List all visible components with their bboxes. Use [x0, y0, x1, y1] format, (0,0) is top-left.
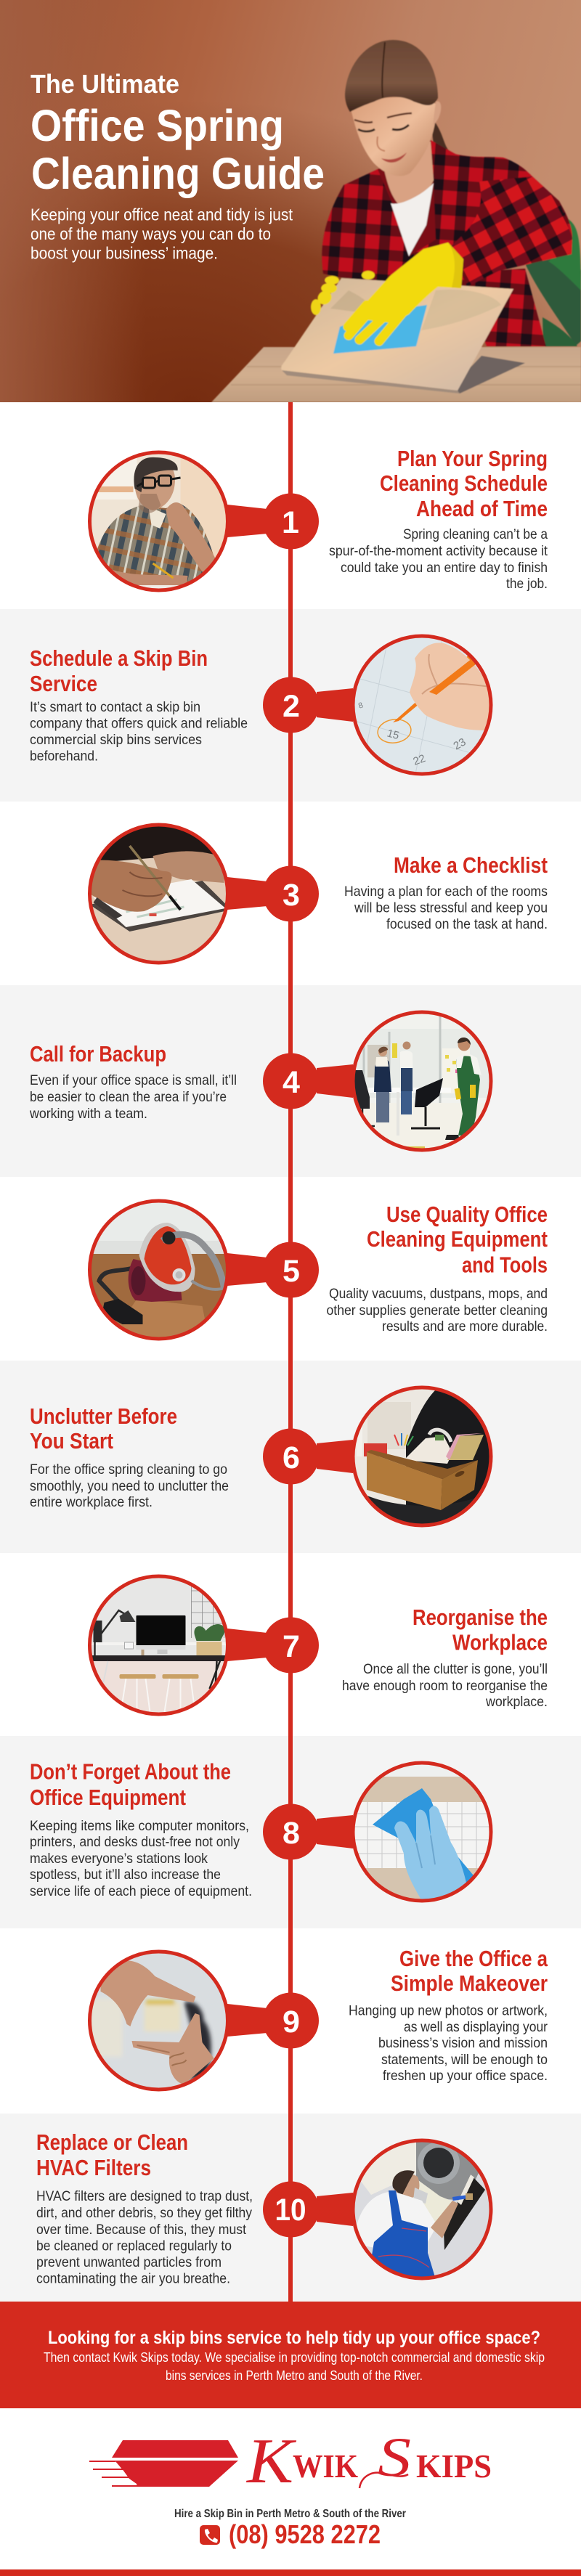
hero photo: woman wiping a laptop	[211, 40, 581, 402]
body text 8: Keeping items like computer monitors,	[30, 1818, 249, 1834]
panel: step 10 hvac filters	[0, 2114, 581, 2302]
body text 4: be easier to clean the area if you’re	[30, 1089, 227, 1105]
heading: use quality cleaning equipment: Cleaning Equipment	[367, 1226, 548, 1252]
connector to number 3	[227, 877, 267, 910]
body text 10: be cleaned or replaced regularly to	[36, 2238, 232, 2254]
heading: use quality cleaning equipment: Use Quality Office	[386, 1202, 548, 1227]
heading: unclutter before you start: You Start	[30, 1428, 113, 1454]
heading: reorganise the workplace	[413, 1605, 548, 1655]
logo wordmark: K	[245, 2426, 297, 2497]
panel: step 1 plan your schedule	[88, 402, 548, 609]
connector to number 2	[317, 688, 353, 722]
body text 8: printers, and desks dust-free not only	[30, 1834, 240, 1850]
icon: phone	[200, 2525, 220, 2545]
body text 1: the job.	[506, 576, 548, 592]
number badge 5: 5	[283, 1254, 300, 1289]
hero title: The Ultimate	[31, 69, 179, 99]
footer red bar	[0, 2569, 581, 2576]
logo wordmark	[245, 2426, 492, 2497]
connector to number 4	[317, 1064, 353, 1098]
logo icon: skip bin with speed lines	[89, 2440, 238, 2487]
body text 4: working with a team.	[29, 1106, 147, 1122]
number badge 8: 8	[283, 1816, 300, 1851]
heading: make a checklist: Make a Checklist	[394, 852, 548, 878]
body text 8	[30, 1818, 252, 1899]
body text 9: business’s vision and mission	[378, 2035, 548, 2051]
body text 5: Quality vacuums, dustpans, mops, and	[329, 1286, 548, 1302]
number badge 4	[263, 1053, 319, 1109]
heading: call for backup: Call for Backup	[30, 1041, 166, 1067]
number badge 7: 7	[283, 1629, 300, 1664]
body text 6: entire workplace first.	[30, 1494, 153, 1510]
number badge 9	[263, 1992, 319, 2049]
number badge 9: 9	[283, 2005, 300, 2039]
body text 10	[36, 2188, 253, 2287]
body text 2: It’s smart to contact a skip bin	[30, 699, 200, 715]
body text 7: Once all the clutter is gone, you’ll	[363, 1661, 548, 1677]
panel: step 3 make a checklist	[88, 802, 548, 985]
number badge 1	[263, 494, 319, 549]
body text 6: smoothly, you need to unclutter the	[30, 1478, 229, 1494]
hero title	[31, 69, 325, 198]
photo: cleaning team in an office	[349, 1008, 495, 1154]
call to action text	[44, 2349, 545, 2383]
body text 5	[327, 1286, 548, 1334]
body text 9: statements, will be enough to	[381, 2052, 548, 2068]
panel: step 2 schedule skip bin	[0, 609, 581, 802]
heading: replace or clean hvac filters: HVAC Filters	[36, 2155, 151, 2180]
tagline: Hire a Skip Bin in Perth Metro & South of the River	[174, 2508, 406, 2520]
body text 1: Spring cleaning can’t be a	[403, 526, 548, 542]
body text 9: freshen up your office space.	[383, 2068, 548, 2084]
panel: hero header	[0, 0, 581, 402]
body text 9: Hanging up new photos or artwork,	[349, 2002, 548, 2018]
photo: hand marking a calendar: 23	[452, 735, 468, 752]
heading: schedule a skip bin service: Service	[30, 671, 97, 696]
photo: red vacuum cleaner	[86, 1197, 231, 1342]
body text 9	[349, 2002, 548, 2084]
heading: replace or clean hvac filters	[36, 2129, 188, 2180]
heading: plan your spring cleaning schedule: Ahead of Time	[416, 496, 548, 521]
photo: hand marking a calendar: 8	[357, 701, 365, 711]
number badge 3	[263, 865, 319, 922]
hero intro text: boost your business’ image.	[31, 244, 218, 263]
heading: replace or clean hvac filters: Replace or Clean	[36, 2129, 188, 2155]
body text 2: company that offers quick and reliable	[30, 716, 248, 732]
heading: plan your spring cleaning schedule: Plan Your Spring	[397, 446, 548, 471]
body text 4	[29, 1072, 237, 1122]
hero title: Office Spring	[31, 101, 284, 150]
body text 9: as well as displaying your	[404, 2019, 548, 2035]
body text 10: HVAC filters are designed to trap dust,	[36, 2188, 253, 2204]
body text 4: Even if your office space is small, it’ll	[30, 1072, 237, 1088]
number badge 1: 1	[282, 505, 299, 540]
body text 3	[344, 884, 548, 932]
body text 3: will be less stressful and keep you	[354, 900, 548, 916]
phone number: (08) 9528 2272	[229, 2519, 381, 2549]
number badge 4: 4	[283, 1065, 300, 1100]
heading: schedule a skip bin service	[30, 645, 208, 696]
body text 10: prevent unwanted particles from	[36, 2254, 222, 2270]
body text 1: spur-of-the-moment activity because it	[329, 543, 548, 559]
logo: kwik skips	[89, 2426, 492, 2497]
number badge 10	[263, 2181, 319, 2238]
photo: gloved hand wiping a keyboard	[349, 1759, 495, 1904]
number badge 2	[263, 677, 319, 733]
heading: don't forget about the office equipment	[30, 1758, 231, 1810]
heading: reorganise the workplace: Workplace	[452, 1629, 548, 1655]
body text 6: For the office spring cleaning to go	[30, 1462, 227, 1477]
heading: don't forget about the office equipment: Office Equipment	[30, 1785, 186, 1810]
hero intro text: Keeping your office neat and tidy is just	[31, 205, 293, 224]
panel: step 6 unclutter	[0, 1361, 581, 1553]
logo wordmark: S	[378, 2427, 411, 2488]
call to action text: bins services in Perth Metro and South of the River.	[166, 2368, 423, 2383]
body text 8: spotless, but it’ll also increase the	[30, 1867, 221, 1883]
connector to number 7	[227, 1629, 267, 1661]
number badge 6: 6	[283, 1440, 300, 1475]
photo: hand marking a calendar: 15	[386, 727, 400, 742]
body text 2	[30, 699, 248, 764]
connector to number 6	[317, 1440, 353, 1473]
number badge 10: 10	[275, 2193, 306, 2227]
number badge 3: 3	[283, 878, 300, 913]
body text 5: results and are more durable.	[382, 1318, 548, 1334]
body text 1: could take you an entire day to finish	[341, 560, 548, 576]
number badge 2: 2	[283, 689, 300, 724]
panel: step 4 call for backup	[0, 985, 581, 1177]
connector to number 8	[317, 1815, 353, 1849]
heading: plan your spring cleaning schedule: Cleaning Schedule	[380, 470, 548, 496]
body text 2: beforehand.	[30, 748, 98, 764]
hero title: Cleaning Guide	[31, 149, 325, 198]
body text 7: workplace.	[485, 1694, 548, 1710]
heading: give the office a simple makeover	[391, 1946, 548, 1996]
number badge 8	[263, 1803, 319, 1860]
connector to number 1	[227, 505, 267, 537]
heading: use quality cleaning equipment: and Tools	[462, 1252, 548, 1278]
photo: hand marking a calendar	[349, 632, 495, 778]
number badge 7	[263, 1618, 319, 1673]
body text 10: over time. Because of this, they must	[36, 2222, 247, 2238]
body text 3: focused on the task at hand.	[386, 916, 548, 932]
number badge 5	[263, 1242, 319, 1298]
heading: unclutter before you start	[30, 1403, 177, 1454]
heading: plan your spring cleaning schedule	[380, 446, 548, 521]
heading: give the office a simple makeover: Simple Makeover	[391, 1970, 548, 1996]
body text 10: contaminating the air you breathe.	[36, 2271, 230, 2287]
heading: schedule a skip bin service: Schedule a Skip Bin	[30, 645, 208, 671]
body text 10: dirt, and other debris, so they get filthy	[36, 2205, 252, 2221]
photo: hands forming a frame	[86, 1948, 231, 2093]
body text 7: have enough room to reorganise the	[342, 1678, 548, 1694]
logo wordmark: WIK	[293, 2447, 358, 2485]
number badge 6	[263, 1429, 319, 1484]
connector to number 5	[227, 1253, 267, 1286]
heading: give the office a simple makeover: Give the Office a	[399, 1946, 548, 1971]
heading: use quality cleaning equipment	[367, 1202, 548, 1278]
connector to number 10	[317, 2193, 353, 2226]
hero intro text	[31, 205, 293, 263]
connector to number 9	[227, 2004, 267, 2037]
body text 3: Having a plan for each of the rooms	[344, 884, 548, 900]
panel: step 5 quality equipment	[88, 1177, 548, 1361]
photo: hand marking a calendar: 22	[412, 752, 427, 768]
body text 6	[30, 1462, 229, 1510]
panel: footer	[0, 2408, 581, 2569]
photo: wooden crate on a chair	[349, 1384, 495, 1529]
photo: technician cleaning an air conditioner	[349, 2137, 495, 2282]
heading: reorganise the workplace: Reorganise the	[413, 1605, 548, 1630]
body text 1	[329, 526, 548, 592]
hero intro text: one of the many ways you can do to	[31, 224, 271, 243]
body text 8: makes everyone’s stations look	[30, 1851, 208, 1867]
body text 7	[342, 1661, 548, 1710]
photo: thinking man with glasses	[86, 449, 231, 594]
body text 5: other supplies generate better cleaning	[327, 1303, 548, 1318]
photo: hand writing in a notebook	[86, 821, 231, 966]
photo: tidy desk with monitor	[86, 1573, 231, 1718]
heading: unclutter before you start: Unclutter Before	[30, 1403, 177, 1429]
panel: step 8 office equipment	[0, 1736, 581, 1928]
body text 8: service life of each piece of equipment.	[30, 1883, 252, 1899]
panel: call to action banner	[0, 2302, 581, 2408]
heading: don't forget about the office equipment: Don’t Forget About the	[30, 1758, 231, 1785]
body text 2: commercial skip bins services	[30, 732, 202, 748]
logo wordmark: KIPS	[416, 2447, 492, 2485]
panel: step 9 simple makeover	[88, 1928, 548, 2114]
panel: step 7 reorganise	[88, 1553, 548, 1736]
